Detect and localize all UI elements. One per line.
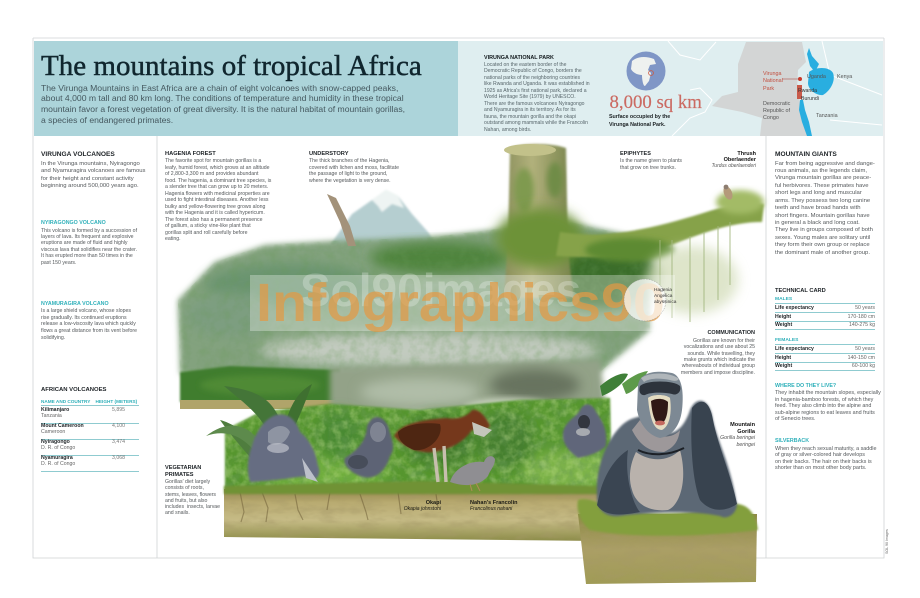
row: Nyamuragira [41,456,139,472]
label: Mountain Gorilla: Mountain Gorilla Gorilla beringei beringei [720,422,755,448]
heading: EPIPHYTES [620,151,651,157]
map label: Democratic Republic of Congo: Democratic Republic of Congo [763,101,790,121]
text: Understory [309,151,399,184]
soil block foreground [578,499,758,584]
map label: Uganda: Uganda [807,74,826,80]
row: males weight: Weight [775,322,792,328]
row: females height: Height [775,354,791,360]
row: females weight [775,362,875,371]
gorilla: seated left [248,414,319,482]
lower dense vegetation [225,398,620,490]
left column: Virunga volcanoes [41,151,146,189]
text: Vegetarian primates [165,465,220,516]
females heading [775,336,875,344]
text: Where do they live [775,383,881,422]
area figure: 8,000 sq km [610,92,702,113]
row: Nyiragongo: D. R. of Congo [41,444,75,450]
label: Thrush Oberlaender: Thrush Oberlaender Turdus oberlaenderi [712,151,756,169]
francolin bird [450,456,495,491]
magnified Hagenia callout: abyssinica [654,299,677,305]
row: males weight [775,321,875,330]
row: Nyamuragira: D. R. of Congo [41,460,75,466]
main gorilla roaring [597,372,737,517]
body: Is a large shield volcano, whose slopes rise gradually. Its continued eruptions release a low-viscosity lava which quickly flows a great distance from its vent before solidifying. [41,308,137,341]
column headers: NAME AND COUNTRY HEIGHT (METERS) [41,399,137,404]
park description: VIRUNGA NATIONAL PARK Located on the eastern border of the Democratic Republic of Congo, borders the national parks of the neighboring countries like Rwanda and Uganda. It was established in 1925 as Africa's first national park, declared a World Heritage Site (1979) by UNESCO. There are the famous volcanoes Nyiragongo and Nyamuragira in its territory. As for its fauna, the mountain gorilla and the okapi outstand among mammals while the Francolin Nahan, among birds. [484,55,590,132]
row: females height [775,354,875,362]
heading: VIRUNGA VOLCANOES [41,151,115,158]
heading: WHERE DO THEY LIVE? [775,383,836,389]
row: males weight: 140-275 kg [849,322,875,328]
row: males life expectancy: Life expectancy [775,305,814,311]
males heading: MALES [775,296,792,302]
label: Okapi: Okapi Okapia johnstoni [404,500,441,512]
column headers [41,398,139,406]
heading: VEGETARIAN PRIMATES [165,465,201,478]
body: Gorillas' diet largely consists of roots, stems, leaves, flowers and fruits, but also includes insects, larvae and snails. [165,479,220,516]
row: Nyiragongo: Nyiragongo [41,439,70,445]
large leaves behind main gorilla [600,371,648,396]
magnified Hagenia callout: Angelica [654,293,673,299]
branch: left dead limb [327,194,356,246]
table: African volcanoes [41,387,139,472]
body: They inhabit the mountain slopes, especially in hagenia-bamboo forests, of which they feed. They also climb into the alpine and sub-alpine regions to eat leaves and fruits of Senecio trees. [775,390,881,422]
row: Kilimanjaro: Tanzania [41,412,62,418]
row: Mount Cameroon: 4,100 [112,423,125,429]
soil strip under the forest [224,481,600,541]
row: females weight: 60-100 kg [852,363,875,369]
row: Nyamuragira: 3,068 [112,455,125,461]
map label: Burundi: Burundi [801,96,819,102]
watermark band: Infographics90 [256,273,665,333]
heading: NYAMURAGIRA VOLCANO [41,301,109,307]
males heading [775,296,875,304]
banana leaves [206,384,312,472]
row: males life expectancy [775,304,875,313]
left column: Nyiragongo volcano [41,220,138,266]
label: Nahan's Francolin: Nahan's Francolin Francolinus nahani [470,500,517,512]
map label: Rwanda: Rwanda [798,88,817,94]
card heading: TECHNICAL CARD [775,288,826,294]
illustration: forest cross-section with gorillas [174,142,768,584]
intro text: The Virunga Mountains in East Africa are a chain of eight volcanoes with snow-capped peaks, about 4,000 m tall and 80 km long. The conditions of temperature and humidity in these tropical mountain favor a forest vegetation of great diversity. It is the natural habitat of mountain gorillas, a species of endangered primates. [41,82,405,125]
row: Nyamuragira: Nyamuragira [41,455,73,461]
watermark band: Sol90images [300,264,581,316]
icon: globe locator [626,52,666,90]
table: technical card [775,288,875,371]
row: Kilimanjaro [41,408,139,424]
icon: thrush bird [722,185,734,201]
heading: COMMUNICATION [707,330,755,336]
row: males life expectancy: 50 years [855,305,875,311]
row: females life expectancy: Life expectancy [775,346,814,352]
body: In the Virunga mountains, Nyiragongo and Nyamuragira volcanoes are famous for their height and constant activity beginning around 500,000 years ago. [41,161,145,189]
row: Mount Cameroon: Cameroon [41,428,65,434]
misty midground [330,360,606,418]
row: females life expectancy: 50 years [855,346,875,352]
magnified Hagenia callout: Hagenia [654,287,672,293]
text: Hagenia forest [165,151,272,242]
table heading: AFRICAN VOLCANOES [41,387,106,393]
okapi [394,410,492,482]
row: Nyiragongo [41,440,139,456]
heading: SILVERBACK [775,438,809,444]
map label: park: Virunga National Park [763,71,783,92]
magnified Hagenia callout [624,279,677,321]
row: Mount Cameroon [41,424,139,440]
row: Mount Cameroon: Mount Cameroon [41,423,84,429]
header panel: title and intro [34,41,458,136]
heading: UNDERSTORY [309,151,349,157]
right column: Mountain giants [775,151,875,256]
body: Is the name given to plants that grow on tree trunks. [620,158,682,171]
row: females life expectancy [775,345,875,354]
area caption: Surface occupied by the Virunga National Park. [609,114,670,128]
gorilla: background right [563,404,606,458]
body: When they reach sexual maturity, a saddle of gray or silver-colored hair develops on their backs. The hair on their backs is shorter than on most other body parts. [775,446,876,471]
row: Nyiragongo: 3,474 [112,439,125,445]
gorilla: seated middle [344,417,393,478]
body: This volcano is formed by a succession of layers of lava. Its frequent and explosive eruptions are made of fluid and highly viscous lava that solidifies near the crater. It has erupted more than 50 times in the past 150 years. [41,228,137,266]
title: The mountains of tropical Africa [41,50,422,82]
body: The favorite spot for mountain gorillas is a leafy, humid forest, which grows at an altitude of 2,800-3,300 m and provides abundant food. The hagenia, a dominant tree species, is a slender tree that can grow up to 20 meters. Hagenia flowers with medicinal properties are used to fight intestinal diseases. Another less bulky and yellow-flowering tree grows along with the Hagenia and it is called hypericum. The forest also has a permanent presence of gallium, a sticky vine-like plant that gorillas split and roll carefully before eating. [165,158,271,242]
left shelf of vegetation [180,366,340,409]
row: males height: Height [775,314,791,320]
branch: mossy limb with epiphytes [556,190,764,322]
map label: Kenya: Kenya [837,74,852,80]
row: females height: 140-150 cm [848,354,875,360]
row: males height: 170-180 cm [848,314,875,320]
mountain [330,190,440,250]
heading: NYIRAGONGO VOLCANO [41,220,106,226]
map label: Tanzania: Tanzania [816,113,838,119]
tree trunk with moss [496,144,584,298]
text: Epiphytes [620,151,682,171]
heading: MOUNTAIN GIANTS [775,151,837,158]
text: Communication [681,330,755,376]
text: Silverback [775,438,876,471]
row: males height [775,312,875,322]
row: females weight: Weight [775,363,792,369]
row: Kilimanjaro: Kilimanjaro [41,407,69,413]
forest canopy, upper slopes [178,222,660,374]
females heading: FEMALES [775,338,798,342]
body: The thick branches of the Hagenia, covered with lichen and moss, facilitate the passage of light to the ground, where the vegetation is very dense. [309,158,399,184]
body: Gorillas are known for their vocalizations and use about 25 sounds. While travelling, they make grunts which indicate the whereabouts of individual group members and impose discipline. [681,338,755,376]
regional map [668,41,882,136]
heading: HAGENIA FOREST [165,151,216,157]
body: Far from being aggressive and dange- rous animals, as the legends claim, Virunga mountain gorillas are peace- ful herbivores. These primates have short legs and long and muscular arms. They possess two long canine teeth and have broad hands with short fingers. Mountain gorillas have in general a black and long coat. They live in groups composed of both sexes. Young males are solitary until they form their own group or replace the dominant male of another group. [775,161,875,256]
left column: Nyamuragira volcano [41,301,137,341]
credit: vertical: SOL 90 Images [885,529,889,554]
row: Kilimanjaro: 5,895 [112,407,125,413]
header panel: Virunga National Park with locator map [458,41,883,136]
